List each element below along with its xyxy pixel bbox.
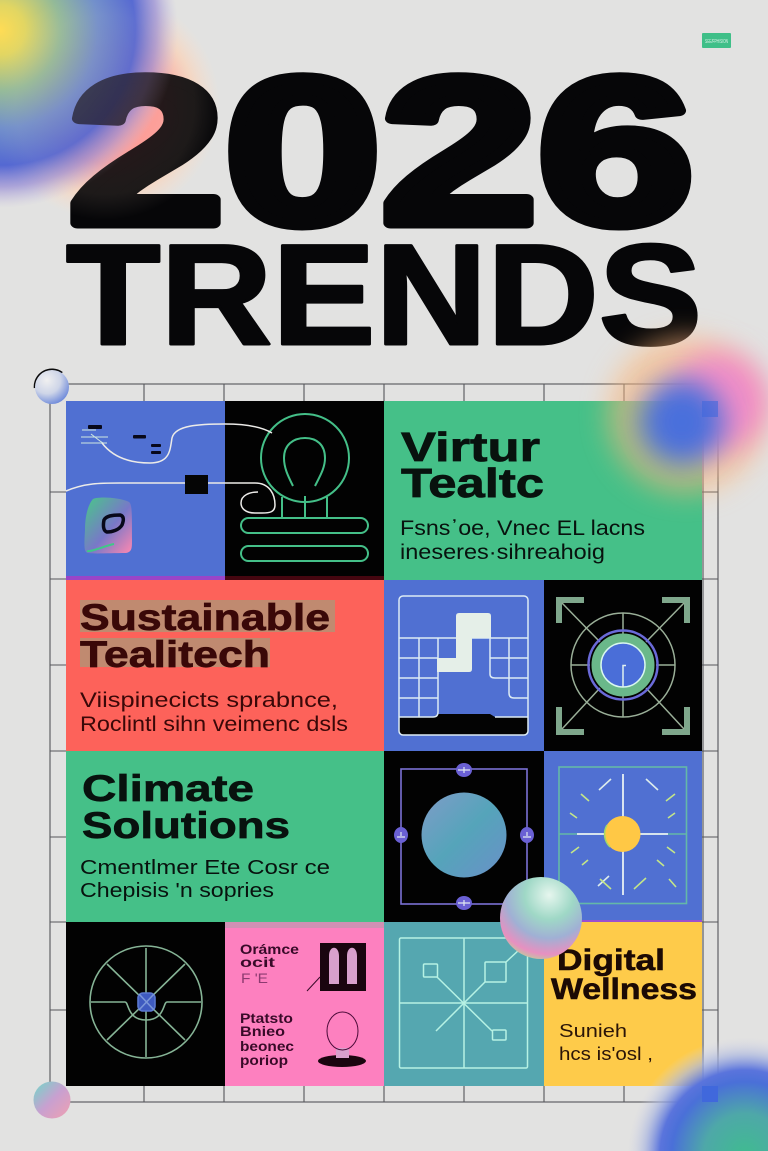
body text [400,517,645,564]
text block: lower: Bnieo [240,1024,285,1039]
body text: ineseres·sihreahoig [400,541,605,564]
gradient blob: top left [0,0,220,220]
heading highlight bands [80,600,335,667]
icon: sun diagram [559,767,686,904]
heading: Digital [557,944,665,977]
sphere: top left with arc [35,370,69,404]
body text: hcs is'osl , [559,1043,653,1064]
panel: blue blueprint [384,580,544,751]
panel: blue sun [544,751,702,922]
panel: pink cards [225,922,384,1086]
blob tint over title [0,0,220,220]
panel: black wheel [66,922,225,1086]
text block: upper: ocit [240,955,276,970]
connector wires [66,424,275,513]
heading: Climate [82,768,254,809]
icon: gradient tile [84,498,132,553]
heading [82,768,290,846]
sphere: large iridescent [500,877,582,959]
body text: Cmentlmer Ete Cosr ce [80,857,330,879]
heading: Wellness [551,973,697,1006]
text block: upper: Orámce [240,942,300,957]
body text [559,1020,653,1064]
icon: network frame [400,938,528,1068]
title: TRENDS: TRENDS [66,216,702,375]
text block: lower [240,1011,295,1068]
panel: black target [544,580,702,751]
sphere: bottom left [34,1082,70,1118]
icon: floor plan [399,596,528,735]
heading: Tealitech [80,634,270,675]
heading [401,424,544,506]
body text: Fsns᾿oe, Vnec EL lacns [400,517,645,540]
heading: Solutions [82,805,290,846]
panel: black orb [384,751,544,922]
heading [80,597,330,675]
text block: lower: poriop [240,1053,288,1068]
body text: Sunieh [559,1020,627,1041]
panel: Digital Wellness yellow [544,922,702,1086]
panel: Climate Solutions green [66,751,384,922]
panel: Sustainable coral [66,580,384,751]
icon: twin pillars [307,943,366,991]
status badge: SEE/FPH/SION [705,39,728,45]
icon: black square [185,475,208,494]
icon: target reticle [556,597,690,735]
body text: Viispinecicts sprabnce, [80,689,338,712]
icon: circuit dashes [81,425,161,454]
heading [551,944,697,1006]
body text: Roclintl sihn veimenc dsls [80,713,348,736]
body text [80,689,348,736]
icon: bulb outline [241,414,368,561]
background grid [50,384,718,1102]
corner squares [702,401,718,1102]
heading: Virtur [401,424,540,470]
gradient blob: bottom right [627,1037,768,1151]
panel: Virtual reality green [384,401,702,580]
heading: Sustainable [80,597,330,638]
heading: Tealtc [401,460,544,506]
gradient blob: right [608,337,768,493]
text block: upper: F 'E [241,971,268,986]
icon: orb in frame [394,763,534,910]
text block: upper [240,942,300,986]
panel: blue circuit [66,401,225,580]
text block: lower: Ptatsto [240,1011,293,1026]
panel: teal network [384,922,544,1086]
body text [80,857,330,902]
panel: black bulb [225,401,384,580]
text block: lower: beonec [240,1039,295,1054]
icon: head bust [318,1012,366,1067]
icon: wheel [90,946,202,1058]
status badge [702,33,731,48]
title: 2026: 2026 [68,36,694,268]
body text: Chepisis 'n sopries [80,880,274,902]
